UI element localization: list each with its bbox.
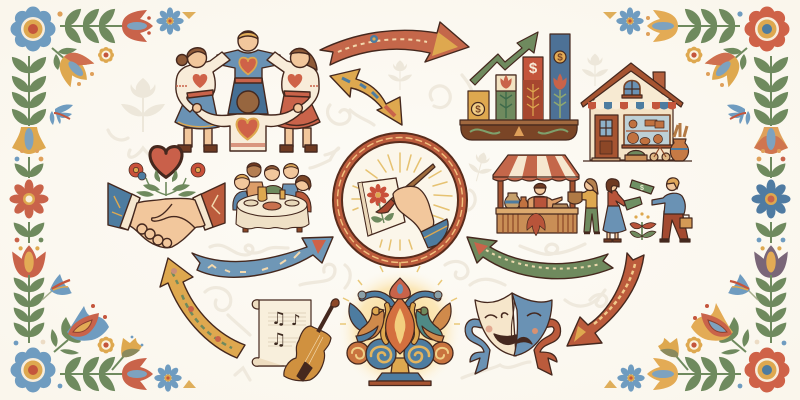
ring flower top-right bbox=[686, 47, 702, 63]
currency symbols on bars: $ bbox=[557, 52, 563, 64]
border: bottom-left corner bbox=[10, 180, 196, 392]
ring flower lower-left bbox=[98, 337, 114, 353]
music notes bbox=[271, 309, 301, 350]
chimney bbox=[653, 72, 665, 94]
big bottom-left tulip bbox=[51, 304, 109, 354]
blue rosette bbox=[10, 6, 56, 52]
illustration: music score and violin bbox=[252, 299, 339, 381]
leaf pair lower right bbox=[756, 222, 786, 243]
pots bbox=[505, 193, 569, 209]
roof bbox=[581, 63, 683, 107]
blue rosette bottom-left bbox=[10, 348, 56, 392]
attic window bbox=[622, 80, 642, 98]
central emblem: painting hand in ornate ring bbox=[333, 133, 467, 267]
glow bbox=[338, 268, 462, 392]
arrow: top terracotta curved bbox=[320, 22, 469, 65]
small gold tulip right bbox=[658, 338, 688, 370]
heart bbox=[150, 147, 182, 177]
woman with banknote bbox=[603, 179, 626, 242]
top stem with leaves bbox=[60, 9, 126, 43]
bottom right tulip bbox=[647, 358, 678, 390]
comedy half bbox=[475, 293, 516, 356]
left scrollwork bbox=[347, 291, 396, 369]
canvas bbox=[358, 178, 405, 236]
left cuff bbox=[108, 183, 140, 230]
pedestal bbox=[369, 358, 431, 386]
gold bar bbox=[468, 91, 489, 121]
faces bbox=[485, 296, 541, 344]
left stem with leaves bbox=[12, 56, 46, 126]
red tulip bbox=[12, 245, 46, 278]
border: top-right corner bbox=[603, 6, 790, 178]
illustration: growth bar chart on shelf bbox=[460, 32, 578, 140]
ornate ring bbox=[333, 133, 467, 267]
bottom stem with leaves bbox=[58, 357, 126, 391]
crate and toy bbox=[625, 147, 670, 161]
blue feather flower bbox=[50, 104, 73, 125]
feather flower lower right bbox=[728, 274, 758, 300]
red rosette bbox=[744, 6, 790, 52]
feather flower right bbox=[727, 104, 750, 125]
front figure bbox=[193, 91, 302, 151]
leaf pair lower bbox=[14, 222, 44, 243]
counter bbox=[496, 208, 578, 236]
small bottom-left flower and triangle bbox=[154, 364, 196, 392]
arrow: yellow double-headed bbox=[330, 69, 402, 125]
right cuff bbox=[193, 183, 225, 230]
purple tulip bbox=[754, 245, 788, 278]
lower right stem bbox=[755, 275, 786, 345]
diners bodies bbox=[233, 182, 311, 212]
right ribbon bbox=[534, 319, 560, 375]
illustration: circle of people embracing bbox=[175, 31, 320, 152]
striped awning bbox=[493, 155, 579, 181]
currency symbols on bars bbox=[475, 52, 563, 116]
diagonal tulip bbox=[52, 45, 99, 92]
central flame bbox=[386, 278, 414, 354]
bottom right stem bbox=[677, 357, 742, 391]
illustration: handshake with heart bouquet bbox=[108, 147, 225, 248]
green bar bbox=[496, 75, 516, 121]
music notes: ♪ bbox=[291, 311, 301, 329]
red rosette bottom-right bbox=[744, 348, 790, 392]
walls bbox=[590, 100, 673, 160]
tragedy half bbox=[512, 293, 552, 356]
currency symbols on bars: $ bbox=[529, 60, 538, 77]
right woman bbox=[267, 48, 320, 152]
seller bbox=[528, 184, 562, 209]
left ribbon bbox=[465, 319, 490, 374]
blue bar bbox=[550, 34, 570, 121]
growth arrow bbox=[470, 32, 538, 85]
gold tulip bbox=[12, 127, 46, 154]
ring flower lower-right bbox=[686, 337, 702, 353]
left bird bbox=[349, 303, 384, 342]
paintbrush bbox=[376, 164, 435, 213]
music notes: ♫ bbox=[271, 330, 286, 350]
banknote symbol: $ bbox=[640, 185, 644, 192]
shelf bbox=[460, 120, 578, 140]
leaves and dots right bbox=[757, 157, 785, 178]
big bottom-right tulip bbox=[691, 303, 749, 354]
gold tulip top-right bbox=[646, 10, 678, 42]
red bar bbox=[523, 57, 543, 121]
diagonal tulip right bbox=[700, 45, 747, 92]
shop window with pottery bbox=[622, 115, 672, 148]
border: top-left corner bbox=[10, 6, 196, 178]
music notes: ♫ bbox=[271, 309, 286, 329]
stem top right bbox=[675, 9, 743, 43]
small gold tulip bbox=[112, 336, 143, 370]
rays bbox=[352, 153, 452, 250]
posts bbox=[498, 178, 575, 209]
gable bbox=[590, 67, 673, 104]
diners heads bbox=[234, 163, 311, 190]
man with briefcase bbox=[652, 178, 692, 242]
arrow: blue curved to centre bbox=[192, 237, 333, 277]
faint background ornaments bbox=[108, 54, 608, 380]
clasped hands bbox=[130, 198, 205, 248]
top-left tulip bbox=[122, 10, 153, 42]
illustration: market stall bbox=[493, 155, 692, 242]
door bbox=[592, 115, 620, 161]
small flower plant bbox=[630, 212, 656, 240]
blue feather flower left bbox=[42, 274, 72, 300]
ground line bbox=[583, 160, 692, 162]
right bird bbox=[416, 303, 451, 342]
small top-right flowers bbox=[603, 7, 644, 35]
right scrollwork bbox=[404, 291, 453, 369]
bouquet bbox=[129, 163, 205, 197]
bottom tulip bbox=[122, 358, 153, 390]
orange tulip right bbox=[754, 127, 788, 154]
arrow: terracotta downward bbox=[567, 253, 644, 346]
hand and sleeve bbox=[393, 186, 448, 248]
violin bbox=[284, 299, 339, 381]
glow rays bbox=[340, 262, 460, 324]
banknotes bbox=[624, 180, 654, 210]
arrow: green curved bbox=[467, 237, 613, 279]
score scroll bbox=[252, 300, 311, 366]
customer with basket bbox=[568, 179, 600, 233]
small top-left flowers bbox=[57, 7, 196, 35]
awning scallops bbox=[588, 102, 676, 110]
currency symbols on bars: $ bbox=[475, 104, 481, 116]
table bbox=[236, 187, 309, 232]
left woman bbox=[175, 48, 230, 152]
small bottom-right flower and triangle bbox=[604, 364, 645, 392]
red daisy left bbox=[10, 180, 49, 218]
illustration: friends around a dinner table bbox=[233, 163, 311, 232]
vase with brushes bbox=[670, 123, 689, 161]
illustration: folk tree of life with birds bbox=[338, 262, 462, 392]
illustration: comedy and tragedy masks bbox=[465, 293, 560, 375]
blue daisy right bbox=[752, 180, 790, 218]
dots and leaf pair bbox=[15, 157, 43, 178]
border: bottom-right corner bbox=[604, 180, 790, 392]
arrow: yellow upward bbox=[160, 258, 245, 358]
illustration: folk craft shop house bbox=[581, 63, 692, 161]
right stem top bbox=[754, 56, 788, 126]
stem lower bbox=[14, 275, 45, 345]
small gold ring flower bbox=[98, 47, 114, 63]
top man bbox=[216, 31, 282, 114]
